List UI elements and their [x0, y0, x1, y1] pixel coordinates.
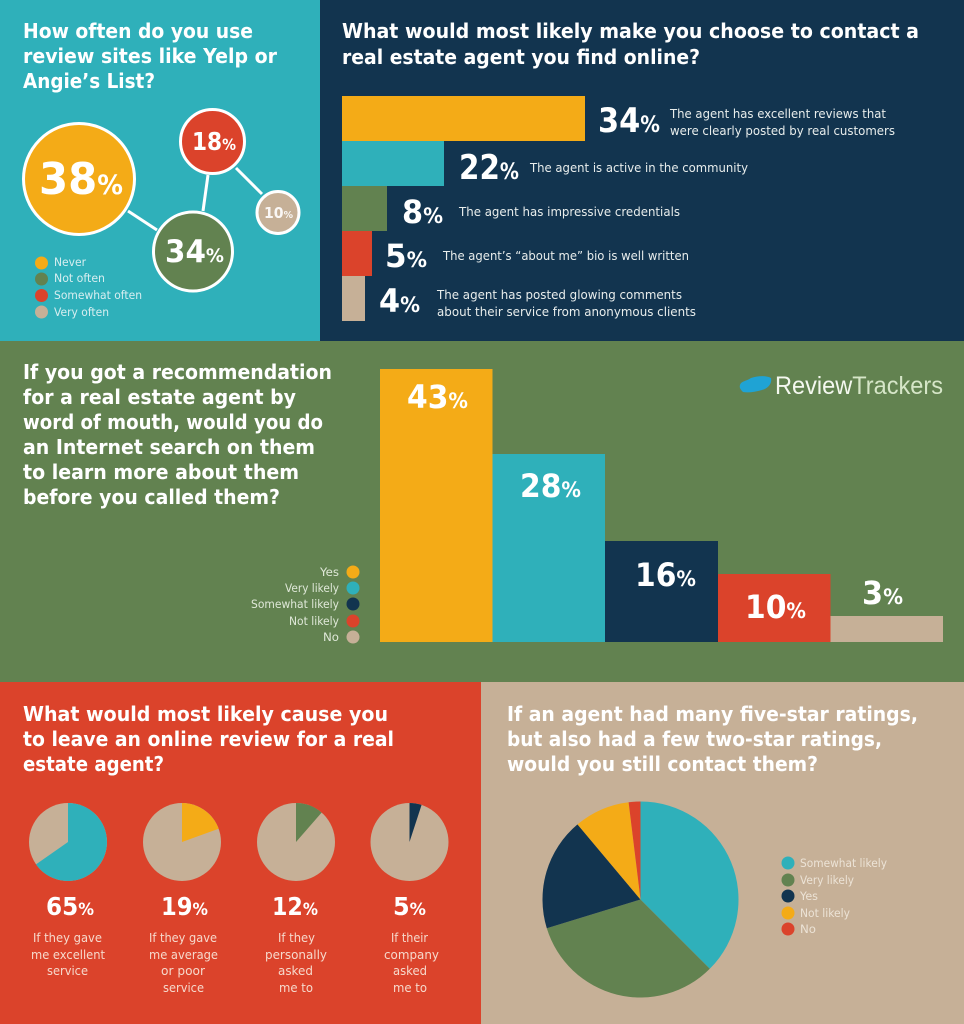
- bubble: 34% not often: 34%: [165, 234, 224, 270]
- bar: 43% yes: [380, 369, 492, 642]
- bubble: 10% very often: 10%: [264, 204, 293, 222]
- legend: review site usage: Somewhat often: [54, 288, 142, 302]
- heading: word of mouth: before you called them?: [23, 485, 280, 509]
- pie group: 65% excellent service: 65%: [46, 892, 94, 921]
- panel: review site usage: [0, 0, 320, 341]
- bar row: 4% anonymous comments: about their service from anonymous clients: [437, 305, 696, 319]
- heading: word of mouth: If you got a recommendation: [23, 360, 332, 384]
- heading: leaving a review: to leave an online review for a real: [23, 727, 394, 751]
- pie group: 5% company asked: If their: [391, 931, 428, 945]
- pie group: 12% personally asked: personally: [265, 948, 327, 962]
- bar row: 4% anonymous comments: [342, 276, 696, 321]
- pie group: 12% personally asked: asked: [278, 964, 313, 978]
- bar: 10% not likely: [718, 574, 830, 642]
- legend: review site usage: Very often: [54, 305, 109, 319]
- bar row: 5% bio: 5%: [385, 237, 427, 275]
- heading: leaving a review: What would most likely cause you: [23, 702, 388, 726]
- heading: two-star ratings: would you still contact them?: [507, 752, 818, 776]
- bar row: 34% reviews: [342, 96, 895, 141]
- pie group: 5% company asked: 5%: [393, 892, 426, 921]
- pie group: 19% average or poor service: service: [163, 981, 204, 995]
- pie chart: contact despite ratings: [542, 801, 739, 998]
- legend: review site usage: Not often: [54, 271, 105, 285]
- heading: two-star ratings: If an agent had many five-star ratings,: [507, 702, 918, 726]
- heading: contact an agent: [342, 19, 919, 69]
- heading: contact an agent: What would most likely make you choose to contact a: [342, 19, 919, 43]
- bubble: 18% somewhat often: 18%: [192, 127, 236, 156]
- bar: 28% very likely: 28%: [520, 467, 581, 505]
- legend: word of mouth: Somewhat likely: [251, 597, 339, 611]
- pie group: 12% personally asked: [257, 803, 335, 995]
- heading: review site usage: [23, 19, 277, 93]
- panel: two-star ratings: [481, 682, 964, 1024]
- pie group: 5% company asked: [370, 803, 448, 995]
- pie group: 65% excellent service: me excellent: [31, 948, 105, 962]
- pie group: 19% average or poor service: 19%: [161, 892, 208, 921]
- heading: leaving a review: [23, 702, 394, 776]
- bar row: 22% community: [342, 141, 748, 188]
- legend: word of mouth: Not likely: [289, 614, 339, 628]
- heading: word of mouth: an Internet search on them: [23, 435, 315, 459]
- legend: contact despite ratings: Yes: [799, 889, 818, 903]
- legend: contact despite ratings: Somewhat likely: [800, 856, 887, 870]
- heading: word of mouth: to learn more about them: [23, 460, 299, 484]
- bubble: 18% somewhat often: [180, 110, 244, 174]
- heading: word of mouth: [23, 360, 332, 509]
- pie group: 19% average or poor service: me average: [149, 948, 218, 962]
- bar row: 22% community: The agent is active in the community: [529, 161, 748, 175]
- heading: review site usage: review sites like Yelp or: [23, 44, 277, 68]
- heading: review site usage: How often do you use: [23, 19, 253, 43]
- bar row: 5% bio: [342, 231, 689, 276]
- heading: two-star ratings: but also had a few two-star ratings,: [507, 727, 882, 751]
- legend: word of mouth: Very likely: [285, 581, 339, 595]
- pie group: 65% excellent service: [29, 803, 107, 978]
- bar: 16% somewhat likely: 16%: [635, 556, 696, 594]
- bar row: 34% reviews: The agent has excellent reviews that: [669, 107, 886, 121]
- bar row: 22% community: 22%: [459, 148, 519, 188]
- legend: review site usage: Never: [54, 255, 86, 269]
- pie group: 65% excellent service: service: [47, 964, 88, 978]
- legend: word of mouth: [251, 565, 360, 644]
- bar: 28% very likely: [492, 454, 605, 642]
- connector lines: [128, 168, 262, 230]
- bar row: 34% reviews: were clearly posted by real customers: [670, 124, 895, 138]
- legend: word of mouth: No: [323, 630, 339, 644]
- pie group: 12% personally asked: If they: [278, 931, 315, 945]
- legend: review site usage: [35, 255, 142, 319]
- legend: contact despite ratings: Very likely: [800, 873, 854, 887]
- bar: 10% not likely: 10%: [745, 588, 806, 626]
- pie group: 5% company asked: company: [384, 948, 439, 962]
- bubble: 10% very often: [257, 192, 299, 234]
- bar: 16% somewhat likely: [605, 541, 718, 642]
- pie group: 12% personally asked: me to: [279, 981, 313, 995]
- pie group: 19% average or poor service: or poor: [161, 964, 205, 978]
- heading: contact an agent: real estate agent you find online?: [342, 45, 700, 69]
- bubble: 38% never: 38%: [39, 154, 123, 205]
- bubble: 34% not often: [154, 212, 232, 291]
- bar: 3% no: [830, 574, 943, 642]
- bar row: 4% anonymous comments: The agent has posted glowing comments: [436, 288, 682, 302]
- legend: contact despite ratings: No: [800, 922, 816, 936]
- bar: 43% yes: 43%: [407, 378, 468, 416]
- heading: word of mouth: word of mouth, would you do: [23, 410, 323, 434]
- legend: word of mouth: Yes: [319, 565, 339, 579]
- heading: leaving a review: estate agent?: [23, 752, 164, 776]
- panel: leaving a review: [0, 682, 481, 1024]
- pie group: 19% average or poor service: [143, 803, 221, 995]
- panel: contact an agent: [320, 0, 964, 341]
- bar row: 8% credentials: [342, 186, 680, 231]
- bar row: 5% bio: The agent’s “about me” bio is well written: [442, 249, 689, 263]
- bar: 3% no: 3%: [862, 574, 903, 612]
- logo: ReviewTrackers: ReviewTrackers: [775, 372, 943, 400]
- pie group: 5% company asked: asked: [393, 964, 427, 978]
- legend: contact despite ratings: [782, 856, 887, 936]
- legend: contact despite ratings: Not likely: [800, 906, 850, 920]
- pie group: 12% personally asked: 12%: [272, 892, 318, 921]
- pie group: 65% excellent service: If they gave: [33, 931, 102, 945]
- panel: word of mouth: [0, 341, 964, 682]
- heading: two-star ratings: [507, 702, 918, 776]
- pie group: 19% average or poor service: If they gave: [149, 931, 217, 945]
- bar row: 4% anonymous comments: 4%: [379, 282, 420, 320]
- heading: review site usage: Angie’s List?: [23, 69, 155, 93]
- bar row: 8% credentials: 8%: [402, 193, 443, 231]
- pie group: 5% company asked: me to: [393, 981, 427, 995]
- bubble: 38% never: [24, 124, 134, 234]
- bar row: 34% reviews: 34%: [598, 101, 660, 141]
- heading: word of mouth: for a real estate agent by: [23, 385, 296, 409]
- bar row: 8% credentials: The agent has impressive credentials: [458, 205, 680, 219]
